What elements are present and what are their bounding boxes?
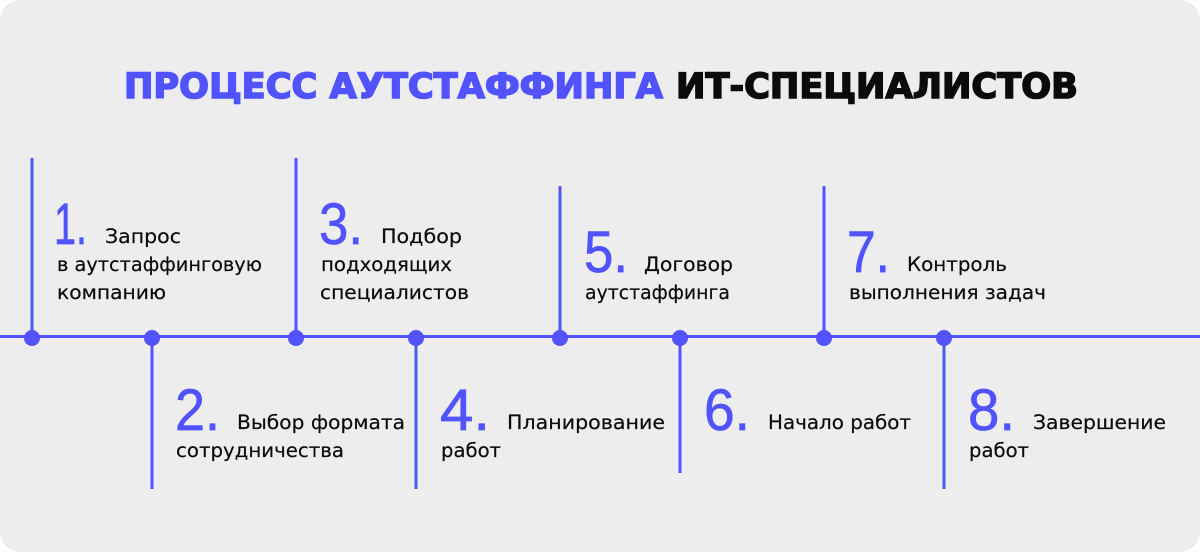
step 2 <box>144 330 405 489</box>
step 1: компанию <box>57 281 166 304</box>
timeline axis <box>0 335 1200 338</box>
step 1: Запрос <box>105 225 181 248</box>
step 6: Начало работ <box>768 411 911 434</box>
step 5: 5. <box>584 220 628 285</box>
step 7: 7. <box>847 220 890 285</box>
step 2: сотрудничества <box>176 439 344 462</box>
step 4: Планирование <box>507 411 665 434</box>
step 1: в аутстаффинговую <box>57 253 262 276</box>
step 4: 4. <box>440 378 490 443</box>
step 6: 6. <box>704 378 750 443</box>
step 8: работ <box>969 439 1029 462</box>
step 7 <box>816 186 1046 346</box>
step 5: аутстаффинга <box>585 281 730 304</box>
step 7: Контроль <box>907 253 1007 276</box>
step 3: специалистов <box>320 281 469 304</box>
step 3: Подбор <box>381 225 462 248</box>
step 1 <box>24 158 262 346</box>
step 1: 1. <box>54 192 87 257</box>
step 7: выполнения задач <box>849 281 1046 304</box>
step 4 <box>408 330 665 489</box>
step 8: Завершение <box>1033 411 1166 434</box>
step 3: подходящих <box>321 253 452 276</box>
title: ИТ-СПЕЦИАЛИСТОВ <box>676 67 1078 107</box>
title: ПРОЦЕСС АУТСТАФФИНГА <box>124 67 663 107</box>
step 8 <box>936 330 1166 489</box>
step 6 <box>672 330 911 473</box>
step 8: 8. <box>968 378 1015 443</box>
step 3: 3. <box>319 192 363 257</box>
step 4: работ <box>441 439 501 462</box>
step 3 <box>288 158 469 346</box>
step 5: Договор <box>644 253 733 276</box>
step 2: Выбор формата <box>237 411 405 434</box>
step 5 <box>552 186 733 346</box>
title <box>124 67 1078 107</box>
step 2: 2. <box>175 378 220 443</box>
